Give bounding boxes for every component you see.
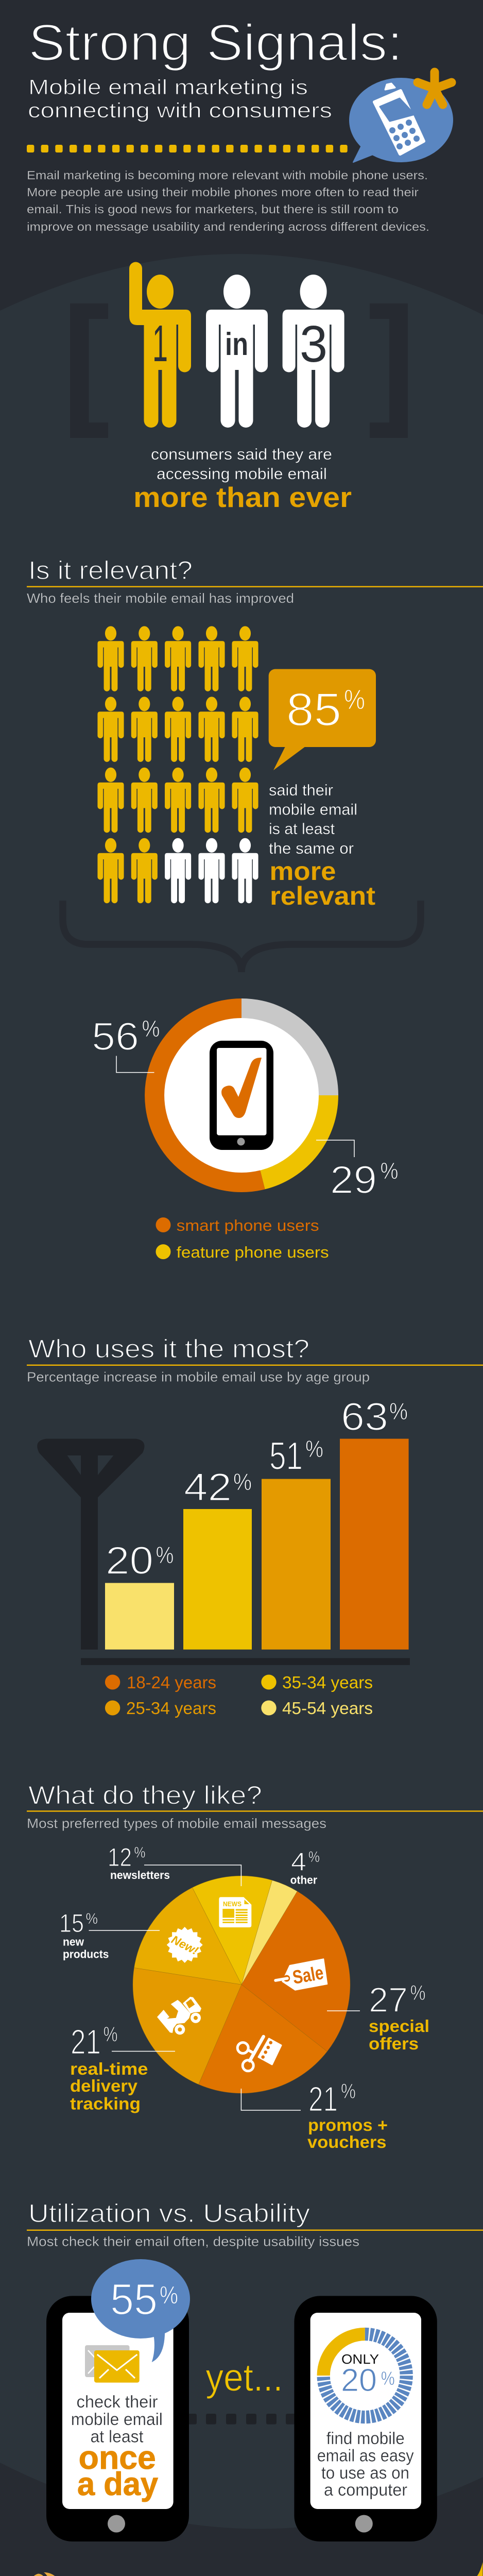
label: 15 percent new products: new: [63, 1936, 84, 1948]
label: 56 percent: [92, 1015, 160, 1073]
relevance text: relevant: [270, 882, 375, 910]
label: 21 percent real-time delivery tracking: [70, 2023, 175, 2113]
label: 12 percent newsletters: 12: [108, 1843, 132, 1872]
subtitle: connecting with consumers: [28, 98, 332, 122]
icon: envelopes: [85, 2345, 140, 2383]
relevance text: [269, 781, 375, 910]
age legend: 35-34 years: [282, 1673, 373, 1692]
heading: is it relevant: Who feels their mobile email has improved: [27, 590, 294, 606]
age legend: 45-54 years: [282, 1699, 373, 1718]
bar chart: 51: [269, 1434, 303, 1478]
left phone text: a day: [77, 2466, 158, 2502]
speech bubble: 55 percent: %: [160, 2282, 178, 2309]
speech bubble: 55 percent: 55: [110, 2275, 158, 2324]
bar chart: 63: [341, 1395, 388, 1439]
subtitle: [28, 75, 332, 122]
1 in 3 caption: [133, 445, 352, 513]
label: 12 percent newsletters: [108, 1843, 241, 1886]
icon: speech bubble with phone: [349, 72, 453, 162]
label: 21 percent real-time delivery tracking: 21: [71, 2023, 101, 2062]
1 in 3 figures: [129, 262, 344, 428]
ring label: ONLY: [341, 2351, 379, 2367]
donut legend: [156, 1216, 329, 1261]
label: 56 percent: %: [142, 1015, 160, 1042]
heading: utilization vs usability: Most check their email often, despite usability issues: [27, 2234, 359, 2249]
label: 15 percent new products: 15: [59, 1909, 84, 1938]
callout: 85 percent: 85: [286, 684, 341, 736]
label: 29 percent: %: [380, 1158, 399, 1184]
bar chart: 42: [184, 1466, 232, 1510]
label: 21 percent promos and vouchers: vouchers: [307, 2132, 386, 2151]
dotted connector: [186, 2414, 296, 2425]
label: 4 percent other: 4: [291, 1848, 306, 1876]
callout: 85 percent: [269, 669, 376, 770]
intro paragraph: improve on message usability and rendering across different devices.: [27, 220, 429, 233]
right phone text: email as easy: [317, 2446, 414, 2465]
label: 4 percent other: other: [290, 1874, 317, 1887]
label: 15 percent new products: %: [85, 1910, 98, 1927]
age legend: 25-34 years: [126, 1699, 216, 1718]
title: Strong Signals:: [28, 14, 403, 72]
heading: who uses it the most: Percentage increase in mobile email use by age group: [27, 1369, 370, 1385]
heading: who uses it the most: Who uses it the most?: [28, 1334, 309, 1363]
heading: utilization vs usability: Utilization vs. Usability: [28, 2199, 310, 2228]
intro paragraph: email. This is good news for marketers, but there is still room to: [27, 202, 399, 216]
ring label: [341, 2351, 395, 2398]
label: 21 percent real-time delivery tracking: tracking: [70, 2094, 141, 2113]
pie chart: [133, 1876, 350, 2093]
logo: e-dialog: [26, 2571, 156, 2576]
bar chart: 20: [106, 1539, 153, 1583]
left phone: [46, 2296, 189, 2541]
right phone text: to use as on: [321, 2463, 409, 2482]
icon: scissors and voucher: [237, 2037, 281, 2071]
heading: utilization vs usability: [27, 2199, 483, 2249]
relevance text: the same or: [269, 839, 354, 857]
icon: antenna: [37, 1439, 144, 1650]
ring label: %: [381, 2368, 395, 2389]
left phone text: [71, 2392, 163, 2502]
icon: new burst: New!: [169, 1933, 201, 1957]
subtitle: Mobile email marketing is: [28, 75, 308, 99]
bar chart: %: [233, 1468, 252, 1495]
relevance text: is at least: [269, 820, 335, 838]
label: 29 percent: [316, 1140, 399, 1202]
icon: truck: [157, 1997, 201, 2036]
age legend: [105, 1673, 373, 1718]
donut legend: feature phone users: [177, 1243, 329, 1261]
1 in 3 caption: more than ever: [133, 481, 352, 513]
left phone text: at least: [91, 2427, 143, 2446]
donut chart: [154, 1008, 329, 1182]
heading: is it relevant: Is it relevant?: [28, 556, 193, 585]
label: 4 percent other: [290, 1848, 320, 1887]
left phone text: check their: [76, 2392, 158, 2411]
label: 4 percent other: %: [308, 1849, 320, 1866]
label: 21 percent real-time delivery tracking: %: [104, 2023, 118, 2046]
1 in 3 figures: in: [225, 327, 248, 362]
callout: 85 percent: %: [344, 684, 365, 715]
icon: sale tag: [275, 1959, 327, 1990]
intro paragraph: Email marketing is becoming more relevant with mobile phone users.: [27, 168, 428, 182]
dotted divider: [27, 145, 348, 152]
relevance text: more: [270, 857, 336, 886]
label: 12 percent newsletters: %: [134, 1844, 145, 1861]
heading: what do they like: [27, 1781, 483, 1831]
relevance text: mobile email: [269, 800, 357, 818]
intro paragraph: [27, 168, 429, 233]
right phone: [294, 2296, 437, 2541]
heading: what do they like: What do they like?: [28, 1781, 262, 1810]
ring label: 20: [341, 2363, 377, 2398]
label: 12 percent newsletters: newsletters: [110, 1869, 170, 1882]
label: 15 percent new products: [59, 1909, 160, 1961]
1 in 3 figures: 1: [152, 315, 168, 372]
label: 27 percent special offers: %: [410, 1981, 426, 2005]
right phone text: find mobile: [326, 2429, 405, 2448]
bar chart: [81, 1395, 410, 1665]
label: 27 percent special offers: [327, 1980, 429, 2053]
icon: newsletter: NEWS: [223, 1900, 242, 1908]
label: 21 percent real-time delivery tracking: delivery: [70, 2076, 138, 2095]
donut legend: smart phone users: [177, 1216, 319, 1234]
intro paragraph: More people are using their mobile phones more often to read their: [27, 185, 419, 199]
relevance text: said their: [269, 781, 333, 799]
speech bubble: 55 percent: [91, 2259, 190, 2362]
people grid: [97, 626, 258, 903]
heading: what do they like: Most preferred types of mobile email messages: [27, 1816, 326, 1831]
yet text: yet...: [206, 2355, 283, 2399]
bar chart: %: [305, 1435, 323, 1462]
right phone text: [317, 2429, 414, 2499]
label: 21 percent promos and vouchers: 21: [308, 2079, 338, 2119]
heading: is it relevant: [27, 556, 483, 606]
1 in 3 caption: accessing mobile email: [157, 465, 327, 483]
right phone text: a computer: [324, 2480, 407, 2499]
label: 27 percent special offers: offers: [369, 2034, 419, 2053]
bar chart: %: [156, 1541, 174, 1568]
icon: newsletter: [219, 1897, 251, 1927]
icon: new burst: [167, 1927, 203, 1963]
label: 21 percent promos and vouchers: %: [341, 2079, 356, 2103]
label: 27 percent special offers: 27: [369, 1980, 408, 2020]
curly brace: [63, 901, 421, 972]
brackets: [70, 303, 408, 438]
1 in 3 figures: 3: [300, 315, 327, 373]
label: 21 percent real-time delivery tracking: real-time: [70, 2059, 148, 2078]
heading: who uses it the most: [27, 1334, 483, 1385]
left phone text: once: [79, 2439, 156, 2476]
icon: sale tag: Sale: [291, 1962, 325, 1988]
progress ring: [323, 2334, 406, 2417]
1 in 3 caption: consumers said they are: [151, 445, 332, 463]
left phone text: mobile email: [71, 2410, 163, 2429]
label: 21 percent promos and vouchers: promos +: [308, 2115, 388, 2134]
label: 29 percent: 29: [330, 1158, 377, 1202]
label: 21 percent promos and vouchers: [241, 2079, 388, 2151]
bar chart: %: [389, 1398, 408, 1425]
label: 15 percent new products: products: [63, 1948, 109, 1961]
label: 56 percent: 56: [92, 1015, 139, 1059]
label: 27 percent special offers: special: [369, 2016, 429, 2036]
page curl corner: [425, 2562, 483, 2576]
age legend: 18-24 years: [127, 1673, 216, 1692]
